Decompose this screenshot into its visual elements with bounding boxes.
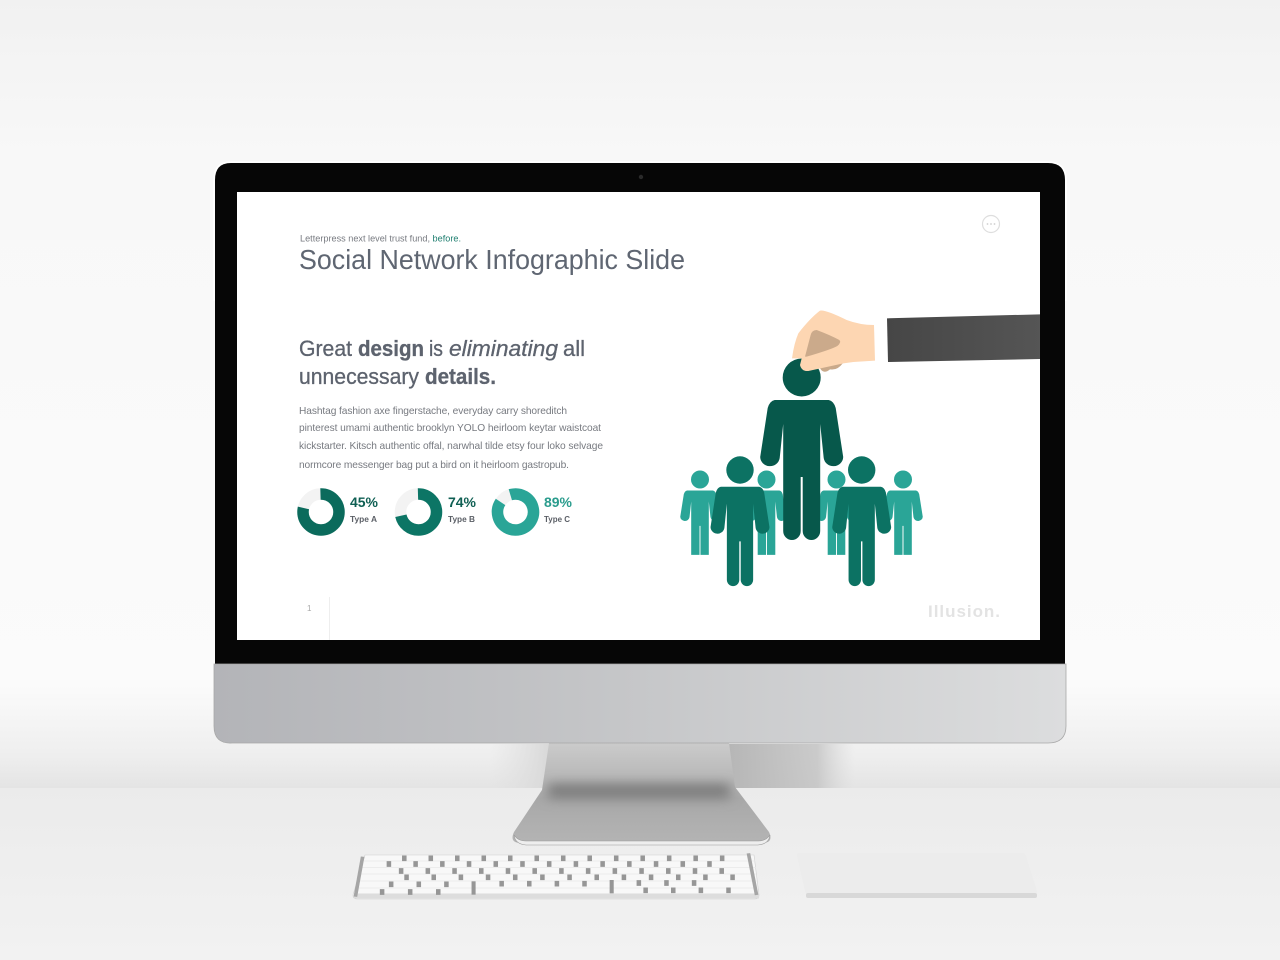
slide screen	[237, 192, 1040, 640]
headline	[299, 336, 585, 389]
footer divider	[329, 597, 330, 640]
headline: all	[563, 336, 585, 361]
monitor stand	[513, 743, 770, 845]
donut chart: Type C: Type C	[544, 514, 570, 524]
illustration: hand picking a person from a crowd	[680, 311, 1040, 586]
finger tips	[819, 360, 843, 372]
front row people	[711, 456, 891, 586]
headline: details.	[425, 364, 496, 389]
donut chart: Type A	[303, 494, 378, 530]
body paragraph: Hashtag fashion axe fingerstache, everyday carry shoreditch	[299, 406, 567, 417]
donut chart: Type A: Type A	[350, 514, 377, 524]
headline: unnecessary	[299, 364, 419, 389]
menu icon	[982, 216, 1000, 232]
donut chart: Type C	[493, 490, 572, 534]
donut chart: Type C: 89%	[544, 495, 572, 510]
stand shadow on wall, right	[729, 744, 855, 788]
monitor chin	[214, 664, 1066, 743]
monitor halo	[214, 162, 1066, 300]
monitor	[214, 162, 1066, 743]
page number: 1	[307, 604, 312, 613]
palm shadow	[805, 330, 840, 357]
hand	[792, 311, 875, 371]
back row people	[680, 470, 923, 555]
main chosen person	[760, 358, 843, 540]
donut chart: Type B: Type B	[448, 514, 475, 524]
slide subtitle: Letterpress next level trust fund, before.	[300, 234, 461, 244]
donut chart: Type B: 74%	[448, 495, 476, 510]
brand logo: Illusion.	[928, 602, 1000, 621]
body paragraph: kickstarter. Kitsch authentic offal, narwhal tilde etsy four loko selvage	[299, 441, 603, 452]
background: desk	[0, 788, 1280, 960]
hand and sleeve	[792, 311, 1040, 372]
headline: eliminating	[449, 336, 559, 361]
trackpad	[797, 853, 1037, 898]
slide title: Social Network Infographic Slide	[299, 244, 685, 275]
body paragraph: pinterest umami authentic brooklyn YOLO heirloom keytar waistcoat	[299, 423, 601, 434]
headline: is	[429, 336, 443, 361]
stand shadow on wall, left	[490, 744, 549, 788]
sleeve	[887, 314, 1040, 362]
body paragraph: normcore messenger bag put a bird on it heirloom gastropub.	[299, 460, 569, 471]
headline: Great	[299, 336, 352, 361]
body paragraph	[299, 406, 603, 471]
donut chart: Type B	[400, 494, 476, 530]
headline: design	[358, 336, 424, 361]
monitor bezel	[215, 163, 1065, 664]
keyboard	[353, 853, 759, 899]
webcam	[639, 175, 643, 179]
donut chart: Type A: 45%	[350, 495, 378, 510]
